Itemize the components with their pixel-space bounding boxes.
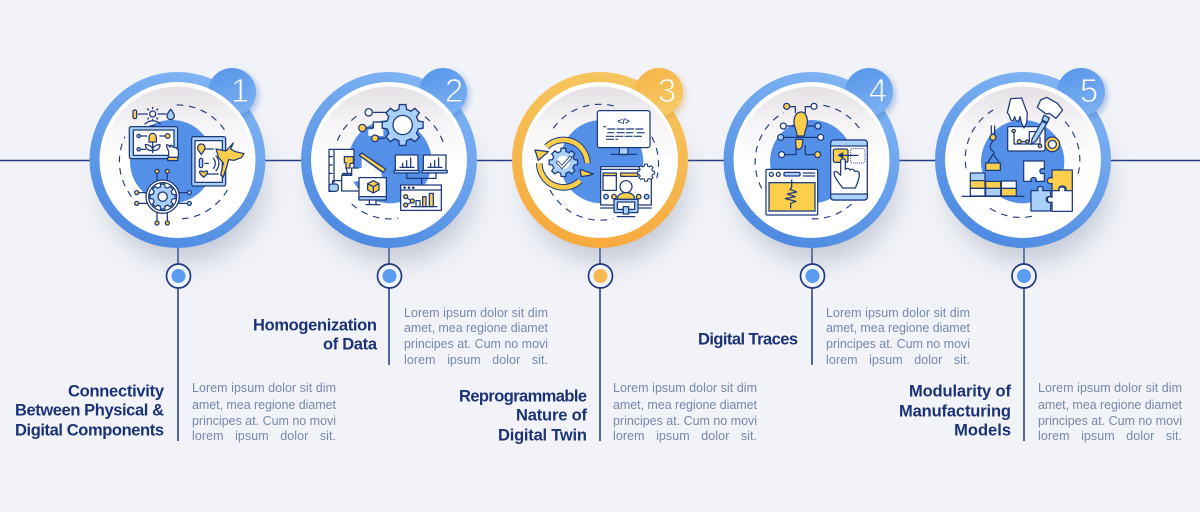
icon 1: connected devices xyxy=(119,105,244,225)
badge 4 xyxy=(845,68,893,116)
title 3 xyxy=(459,388,588,444)
node 3 xyxy=(588,264,612,288)
title 5 xyxy=(899,382,1012,440)
refresh gear xyxy=(535,140,593,187)
badge 2: 2 xyxy=(445,72,463,109)
text 3 xyxy=(613,381,758,443)
seismograph window xyxy=(766,169,818,215)
text 3: amet, mea regione diamet xyxy=(613,398,758,412)
text 4: principes at. Cum no movi xyxy=(826,337,970,351)
text 5: principes at. Cum no movi xyxy=(1038,414,1182,428)
connector line 1 xyxy=(177,240,179,441)
code monitor: </> xyxy=(617,116,630,126)
connector line 5 xyxy=(1023,240,1025,441)
step 1 xyxy=(15,68,337,443)
step 3 xyxy=(459,68,758,444)
puzzle pieces xyxy=(1024,161,1072,211)
badge 2 xyxy=(419,68,467,116)
gear chip xyxy=(135,169,191,225)
text 2 xyxy=(404,306,549,367)
title 1 xyxy=(15,382,165,440)
ring 4 xyxy=(724,72,900,248)
badge 3 xyxy=(635,68,683,116)
text 4: amet, mea regione diamet xyxy=(826,321,971,335)
connector line 2 xyxy=(388,240,390,365)
left tablet xyxy=(129,127,178,161)
laptops xyxy=(394,155,447,185)
title 3: Nature of xyxy=(516,406,588,424)
text 3: lorem ipsum dolor sit. xyxy=(613,429,757,443)
step 5 xyxy=(899,68,1183,443)
ring 3 xyxy=(512,72,688,248)
icon 2: data systems xyxy=(329,105,447,219)
text 3: principes at. Cum no movi xyxy=(613,414,757,428)
title 4: Digital Traces xyxy=(698,330,798,348)
title 5: Modularity of xyxy=(909,382,1012,400)
connector line 3 xyxy=(599,240,601,441)
badge 1: 1 xyxy=(231,72,249,109)
step 2 xyxy=(253,68,549,367)
node 1 xyxy=(166,264,190,288)
badge 4: 4 xyxy=(869,72,887,109)
title 1: Between Physical & xyxy=(15,402,164,420)
monitor xyxy=(359,178,386,205)
operator screen xyxy=(601,164,655,217)
text 1 xyxy=(192,381,337,443)
text 4: Lorem ipsum dolor sit dim xyxy=(826,306,970,320)
text 5 xyxy=(1038,381,1183,443)
text 1: Lorem ipsum dolor sit dim xyxy=(192,381,336,395)
text 4: lorem ipsum dolor sit. xyxy=(826,353,970,367)
badge 5 xyxy=(1057,68,1105,116)
title 5: Manufacturing xyxy=(899,402,1011,420)
timeline axis xyxy=(0,160,1200,162)
text 5: Lorem ipsum dolor sit dim xyxy=(1038,381,1182,395)
text 5: lorem ipsum dolor sit. xyxy=(1038,429,1182,443)
text 1: principes at. Cum no movi xyxy=(192,414,336,428)
title 2: Homogenization xyxy=(253,316,377,334)
text 2: Lorem ipsum dolor sit dim xyxy=(404,306,548,320)
icon 5: modular manufacturing xyxy=(962,97,1080,217)
title 5: Models xyxy=(954,422,1011,440)
dashboard xyxy=(401,185,441,210)
crane hook xyxy=(986,126,1000,170)
title 1: Digital Components xyxy=(15,422,164,440)
title 1: Connectivity xyxy=(68,382,165,400)
right tablet xyxy=(192,137,244,186)
sensors row xyxy=(133,107,174,127)
footprint xyxy=(778,103,824,158)
node 4 xyxy=(800,264,824,288)
badge 5: 5 xyxy=(1080,72,1098,109)
stacked blocks xyxy=(962,173,1024,196)
ring 1 xyxy=(90,72,266,248)
node 5 xyxy=(1012,264,1036,288)
text 5: amet, mea regione diamet xyxy=(1038,398,1183,412)
gear xyxy=(359,105,423,145)
text 1: lorem ipsum dolor sit. xyxy=(192,429,336,443)
phone xyxy=(831,140,867,200)
title 3: Digital Twin xyxy=(498,426,587,444)
badge 3: 3 xyxy=(658,72,676,109)
text 2: amet, mea regione diamet xyxy=(404,321,549,335)
title 2 xyxy=(253,316,378,354)
text 2: lorem ipsum dolor sit. xyxy=(404,353,548,367)
ring 5 xyxy=(935,72,1111,248)
text 3: Lorem ipsum dolor sit dim xyxy=(613,381,757,395)
text 2: principes at. Cum no movi xyxy=(404,337,548,351)
circuit board and hands xyxy=(1007,97,1063,152)
connector line 4 xyxy=(811,240,813,365)
robot arm xyxy=(329,149,386,191)
title 3: Reprogrammable xyxy=(459,388,587,406)
badge 1 xyxy=(208,68,256,116)
ring 2 xyxy=(301,72,477,248)
icon 4: digital traces xyxy=(755,103,867,219)
text 4 xyxy=(826,306,971,367)
title 2: of Data xyxy=(323,336,378,354)
node 2 xyxy=(378,264,402,288)
text 1: amet, mea regione diamet xyxy=(192,398,337,412)
step 4 xyxy=(698,68,971,367)
icon 3: reprogramming xyxy=(535,104,659,220)
